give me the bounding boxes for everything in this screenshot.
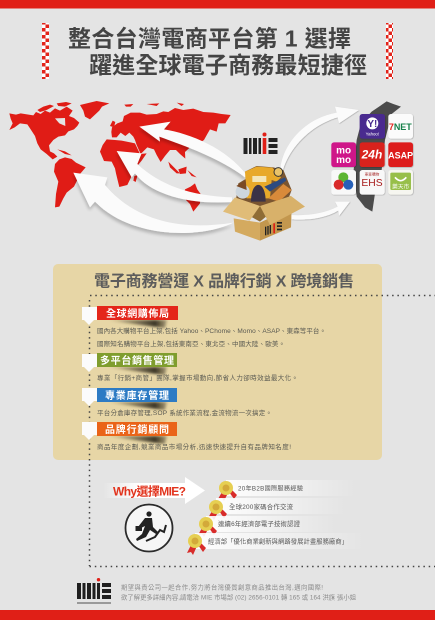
why MIE heading: Why選擇MIE? <box>113 484 186 498</box>
reasons list <box>187 480 365 555</box>
label <box>97 306 178 320</box>
section: multi-platform sales: 多平台銷售管理 <box>100 354 174 367</box>
dotted connector <box>90 296 435 566</box>
tile: EHS <box>360 170 385 195</box>
tile: momo: mo <box>336 145 351 156</box>
section: global shopping: 全球網購佈局 <box>106 307 169 320</box>
tile: green shop: 樂天市 <box>392 182 409 190</box>
body text: 平台分倉庫存管理,SOP 系統作業流程,金流物流一次搞定。 <box>97 408 272 417</box>
tag <box>82 354 97 372</box>
label <box>97 422 177 436</box>
reason 4: 經濟部「優化商業創新與網路發展計畫服務廠商」 <box>208 536 348 546</box>
section: multi-platform sales <box>82 353 298 382</box>
world map <box>9 101 231 212</box>
footer contact text: 欲了解更多詳細內容,請電洽 MIE 市場部 (02) 2656-0101 轉 165 或 164 洪旗 張小姐 <box>121 592 357 602</box>
label <box>97 353 177 367</box>
footer contact text <box>121 582 357 602</box>
reason 1 <box>218 480 356 501</box>
reason 2: 全球200家碼合作交流 <box>229 502 294 511</box>
right checkered strip <box>386 23 393 79</box>
tile: 7net: 7NET <box>389 122 412 132</box>
tile: EHS: EHS <box>361 178 383 189</box>
footer contact text: 期望與貴公司一起合作,努力將台灣優質創意商品推出台灣,邁向國際! <box>121 582 323 592</box>
arrow to Asia <box>139 122 247 177</box>
title line 1: 整合台灣電商平台第 1 選擇 <box>68 26 351 52</box>
panel heading: 電子商務營運 X 品牌行銷 X 跨境銷售 <box>94 272 354 290</box>
panel background <box>53 264 382 460</box>
tile: Yahoo <box>360 114 385 139</box>
lower arrow <box>291 202 350 220</box>
label shadow <box>108 402 167 410</box>
map of Taiwan <box>354 101 401 212</box>
panel: services <box>82 272 354 451</box>
tile: Yahoo: Y! <box>367 119 377 130</box>
arrow to South America <box>73 173 233 233</box>
section: brand consulting <box>82 422 291 451</box>
tile: 24h: 24h <box>361 148 382 162</box>
arrows to Taiwan <box>280 107 359 220</box>
reason 1: 20年B2B國際服務經驗 <box>238 484 303 492</box>
arrow to Africa <box>117 151 232 202</box>
tile: EHS: 東森購物 <box>365 171 380 176</box>
reason 3 <box>198 516 336 537</box>
goods <box>235 166 292 213</box>
section: inventory <box>82 388 272 417</box>
why MIE arrow <box>103 477 205 504</box>
left checkered strip <box>42 23 49 79</box>
title block <box>42 23 393 79</box>
bottom red bar <box>0 610 435 620</box>
tile: three-colour globe <box>331 170 356 195</box>
icon: running businessman <box>126 504 172 552</box>
world arrows <box>73 122 247 233</box>
tile: Yahoo: Yahoo! <box>366 131 379 136</box>
hudson bay <box>55 118 65 126</box>
upper arrow <box>280 107 359 170</box>
tag <box>82 422 97 440</box>
label shadow <box>108 320 167 328</box>
tile: ASAP: ASAP <box>388 151 413 161</box>
title line 2: 躍進全球電子商務最短捷徑 <box>89 52 367 78</box>
top red bar <box>0 0 435 8</box>
tag <box>82 388 97 406</box>
box <box>223 196 305 241</box>
section: brand consulting: 品牌行銷顧問 <box>105 423 169 436</box>
reason 2 <box>208 498 346 520</box>
label shadow <box>108 367 167 375</box>
MIE logo <box>244 132 278 154</box>
label shadow <box>108 436 167 444</box>
platform logo tiles <box>331 114 413 195</box>
tile: momo <box>331 142 356 167</box>
body text: 商品年度企劃,競業商品市場分析,迅速快速提升自有品牌知名度! <box>97 442 291 451</box>
section: inventory: 專業庫存管理 <box>105 389 169 402</box>
footer logo <box>77 578 111 604</box>
label <box>97 388 177 402</box>
section: global shopping <box>82 306 326 348</box>
body text: 專業「行銷+商管」團隊,掌握市場動向,節省人力卻時效益最大化。 <box>97 373 298 382</box>
reason 3: 連續6年經濟部電子技術認證 <box>218 519 301 528</box>
cardboard box with goods <box>223 166 305 241</box>
section: global shopping: 國際知名購物平台上架,包括東南亞、東北亞、中國大陸、歐美。 <box>97 339 285 348</box>
tile: momo: mo <box>336 155 351 166</box>
tag <box>82 307 97 325</box>
body text: 國內各大購物平台上架,包括 Yahoo、PChome、Momo、ASAP、東森等平台。 <box>97 326 326 335</box>
reason 4 <box>187 533 365 555</box>
